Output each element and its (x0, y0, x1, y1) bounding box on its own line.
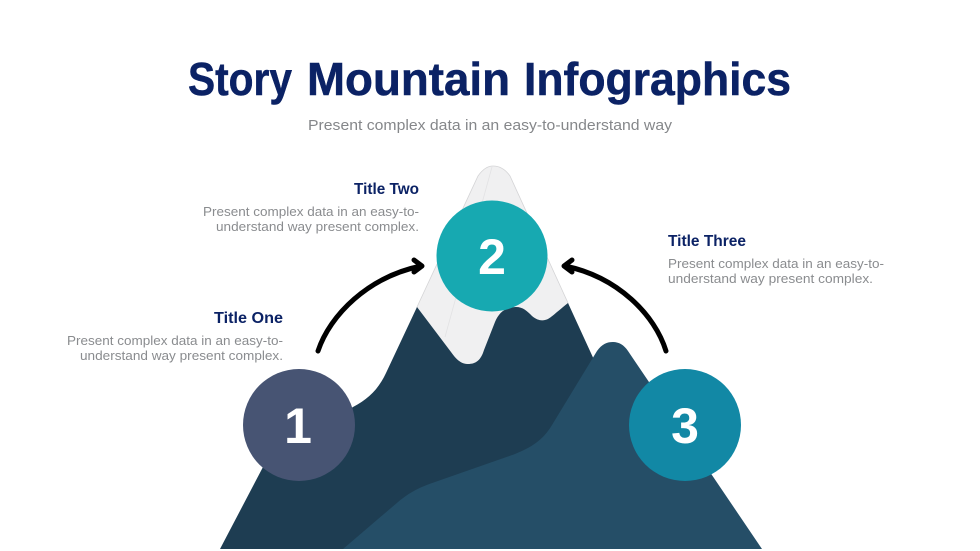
text block: title two: Present complex data in an easy-to- (203, 204, 419, 219)
text block: title two (203, 181, 419, 234)
subtitle: Present complex data in an easy-to-understand way (308, 118, 673, 134)
title: Mountain (307, 53, 510, 105)
circle 2 (436, 200, 548, 312)
text block: title three: Title Three (668, 233, 746, 250)
text block: title two: understand way present complex. (216, 219, 419, 234)
text block: title one: understand way present complex. (80, 348, 283, 363)
arrow: three to two (564, 260, 666, 351)
circle 3 (629, 369, 741, 481)
title: Infographics (524, 53, 791, 105)
title (188, 53, 791, 105)
text block: title one (67, 310, 283, 363)
title: Story (188, 53, 292, 105)
circle 1: 1 (284, 398, 312, 454)
text block: title one: Present complex data in an easy-to- (67, 333, 283, 348)
mountain illustration (220, 166, 762, 549)
text block: title two: Title Two (354, 181, 419, 198)
arrow: one to two (318, 260, 422, 351)
front mountain (343, 342, 762, 549)
circle 3: 3 (671, 398, 699, 454)
dark mountain (220, 303, 640, 549)
snow cap (417, 166, 575, 372)
snow crease line (445, 167, 492, 337)
text block: title three (668, 233, 884, 286)
circle 1 (243, 369, 355, 481)
circle 2: 2 (478, 229, 506, 285)
text block: title one: Title One (214, 310, 283, 327)
text block: title three: Present complex data in an easy-to- (668, 256, 884, 271)
text block: title three: understand way present complex. (668, 271, 873, 286)
